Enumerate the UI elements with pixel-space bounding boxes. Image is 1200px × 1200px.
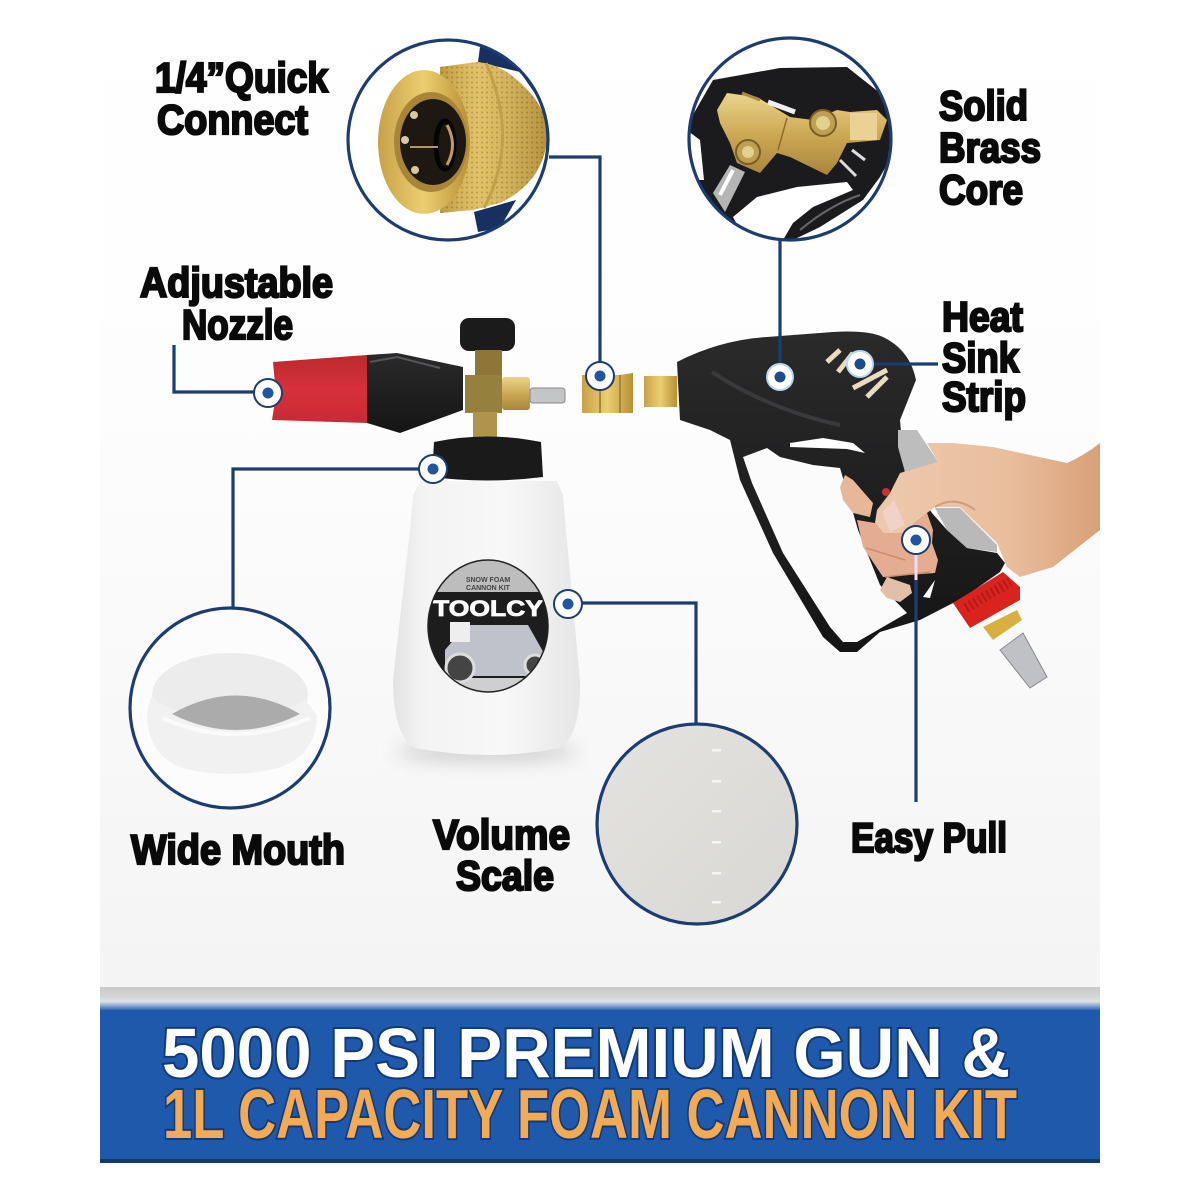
connector lines	[174, 157, 938, 802]
hand	[840, 443, 1100, 602]
label: volume: Volume	[433, 811, 570, 858]
bottle shadow	[395, 742, 579, 762]
label: adjustable: Adjustable	[140, 259, 333, 306]
banner title line one: 5000 PSI PREMIUM GUN &	[162, 1014, 1010, 1092]
nozzle red	[272, 355, 367, 423]
circle: quick connect detail	[378, 47, 546, 232]
label: nozzle: Nozzle	[182, 301, 293, 348]
circle: volume scale detail	[597, 724, 797, 924]
label: quick connect: 1/4”Quick	[155, 54, 329, 101]
bottle label: TOOLCY	[433, 596, 543, 621]
brass fitting	[983, 610, 1022, 640]
palm and arm	[875, 443, 1100, 577]
bottle label: CANNON KIT	[466, 585, 511, 592]
red collar	[953, 572, 1020, 628]
brass body	[465, 350, 530, 438]
label: core: Core	[939, 166, 1023, 213]
label: quick connect line two: Connect	[157, 96, 308, 143]
gun body	[677, 332, 1005, 652]
bottle cap	[432, 436, 543, 480]
nozzle black	[367, 353, 463, 433]
label: brass: Brass	[939, 124, 1041, 171]
heat sink strips	[827, 350, 887, 397]
grip slot	[923, 580, 935, 598]
circle outline: solid brass core	[689, 38, 891, 240]
foam cannon	[272, 318, 580, 762]
label: strip: Strip	[942, 373, 1026, 420]
label: easy pull: Easy Pull	[851, 814, 1007, 861]
trigger slot	[790, 438, 865, 453]
circle: wide mouth detail	[130, 608, 330, 808]
knob	[460, 318, 515, 351]
circle outline: quick connect	[348, 40, 548, 240]
pressure gun	[677, 332, 1100, 688]
label: heat: Heat	[942, 293, 1023, 340]
label: scale: Scale	[456, 852, 554, 899]
bottle	[393, 481, 580, 755]
gun body groove	[712, 372, 840, 425]
banner	[100, 987, 1100, 1163]
fingers	[857, 513, 938, 577]
silver plug	[530, 388, 565, 403]
label: sink: Sink	[942, 334, 1020, 381]
label: solid: Solid	[939, 82, 1028, 129]
grey grip upper	[898, 430, 938, 472]
bottle label: SNOW FOAM	[466, 577, 510, 584]
label: wide mouth: Wide Mouth	[131, 826, 345, 873]
background panel	[100, 0, 1100, 988]
grey grip lower	[935, 508, 997, 552]
bottle label	[428, 560, 548, 692]
circle: solid brass core detail	[690, 67, 890, 238]
quick connector brass	[582, 373, 677, 413]
marker dots	[254, 351, 930, 618]
silver plug	[1000, 633, 1047, 688]
trigger opening	[743, 448, 907, 642]
